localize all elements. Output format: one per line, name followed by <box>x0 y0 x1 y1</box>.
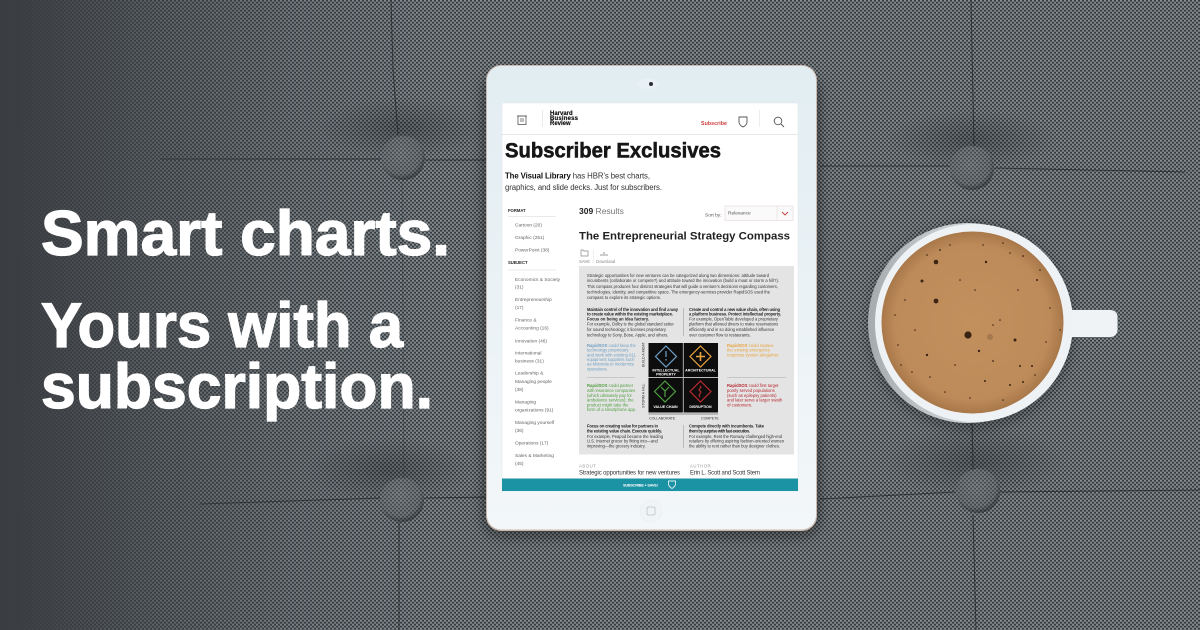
strategy text: architectural: For example, OpenTable developed a proprietary <box>689 316 779 321</box>
foam bubbles <box>894 242 1061 401</box>
tablet <box>484 65 819 536</box>
strategy text: architectural: Create and control a new value chain, often using <box>689 307 780 312</box>
matrix axes: STORM A HILL <box>642 383 646 408</box>
RapidSOS note: disruption: (such as epilepsy patients) <box>727 393 777 398</box>
page intro: graphics, and slide decks. Just for subscribers. <box>505 183 662 192</box>
RapidSOS note: disruption: RapidSOS could first target <box>727 383 779 388</box>
sort control: Sort by: <box>705 212 722 218</box>
strategy text: disruption <box>689 424 785 448</box>
headline: Smart charts. <box>41 199 450 269</box>
RapidSOS note: intellectual property: RapidSOS could keep the <box>587 343 637 348</box>
sidebar filters: Accounting (16) <box>515 326 549 332</box>
strategy text: value chain: improving—the grocery industry. <box>587 443 646 448</box>
RapidSOS note: disruption: poorly served populations <box>727 388 775 393</box>
strategy matrix: INTELLECTUAL <box>652 368 680 372</box>
strategy text: architectural <box>689 307 781 338</box>
sidebar filters: (36) <box>515 428 524 434</box>
sidebar filters: Entrepreneurship <box>515 297 552 303</box>
sidebar filters: Economics & Society <box>515 277 561 283</box>
site header: Subscribe <box>701 121 727 127</box>
about and author: Strategic opportunities for new ventures <box>579 470 680 476</box>
RapidSOS note: value chain: product might take the <box>587 402 629 407</box>
tablet camera <box>638 79 658 89</box>
sidebar filters: (45) <box>515 461 524 467</box>
coffee cup <box>868 223 1118 429</box>
save and download actions: Download <box>596 259 616 264</box>
sidebar filters: Operations (17) <box>515 440 549 446</box>
RapidSOS note: value chain: RapidSOS could partner <box>587 383 634 388</box>
sidebar filters: SUBJECT <box>508 260 528 265</box>
page intro: The Visual Library has HBR’s best charts, <box>505 172 650 180</box>
site header <box>502 110 798 134</box>
sidebar filters: PowerPoint (38) <box>515 248 550 254</box>
chart intro text <box>587 273 779 300</box>
icon: green diamond <box>654 381 676 402</box>
RapidSOS note: architectural: the existing emergency <box>727 348 771 353</box>
matrix axes <box>642 341 719 420</box>
chart intro text: technologies, identity, and competitive space. The emergency-services provider RapidSOS used the <box>587 290 771 294</box>
chart intro text: This compass produces four distinct strategies that will guide a venture’s decisions regarding customers, <box>587 284 778 289</box>
chart intro text: incumbents (collaborate or compete?) and attitude toward the innovation (build a moat or storm a hill?). <box>587 278 779 283</box>
strategy text: value chain: Focus on creating value for partners in <box>587 424 658 428</box>
sidebar filters: Finance & <box>515 318 537 324</box>
RapidSOS note: architectural: response system altogether. <box>727 352 779 357</box>
strategy text: intellectual property: to create value within the existing marketplace. <box>587 312 673 317</box>
sort control: Relevance <box>728 210 751 216</box>
strategy text: disruption: retailers by offering aspiring fashion-oriented women <box>689 439 785 444</box>
about and author <box>579 464 760 476</box>
icon: menu <box>517 116 527 124</box>
chart intro text: compass to explore its strategic options. <box>587 295 661 300</box>
sidebar filters: business (31) <box>515 358 544 364</box>
RapidSOS note: value chain <box>587 383 636 412</box>
tablet home button <box>640 500 662 522</box>
icon: blue diamond <box>656 346 676 367</box>
strategy text: architectural: a platform business. Protect intellectual property. <box>689 312 781 317</box>
sidebar filters: Managing yourself <box>515 420 555 426</box>
sidebar filters: Leadership & <box>515 370 544 376</box>
strategy text: value chain: the existing value chain. Execute quickly. <box>587 428 662 434</box>
results count: 309 Results <box>579 206 624 216</box>
logo <box>550 111 579 127</box>
logo: Business <box>550 116 579 122</box>
about and author: ABOUT <box>579 464 596 468</box>
sidebar filters: organizations (91) <box>515 408 554 414</box>
cup handle <box>1060 310 1118 337</box>
sidebar filters: (31) <box>515 284 524 290</box>
strategy matrix: VALUE CHAIN <box>653 405 678 409</box>
strategy matrix: DISRUPTION <box>689 405 712 409</box>
sidebar filters: Managing <box>515 400 536 406</box>
RapidSOS note: intellectual property: as Motorola to modernize <box>587 362 635 367</box>
strategy text: disruption: Compete directly with incumbents. Take <box>689 424 765 428</box>
strategy matrix: PROPERTY <box>656 372 676 376</box>
RapidSOS note: intellectual property: technology proprietary <box>587 348 629 353</box>
about and author: AUTHOR <box>690 464 711 468</box>
strategy text: architectural: efficiently and in so doing established influence <box>689 327 775 332</box>
RapidSOS note: intellectual property <box>587 343 637 371</box>
subscribe bar <box>502 478 798 491</box>
matrix axes: COLLABORATE <box>649 416 676 420</box>
headline: subscription. <box>41 352 433 422</box>
tablet screen <box>502 103 798 491</box>
strategy text: intellectual property: Maintain control of the innovation and find a way <box>587 307 679 312</box>
sidebar filters: Cartoon (20) <box>515 222 542 228</box>
RapidSOS note: intellectual property: and work with existing 911 <box>587 352 636 357</box>
icon: red diamond <box>690 381 711 402</box>
page intro <box>505 172 662 192</box>
chart intro text: Strategic opportunities for new ventures can be categorized along two dimensions: attitude toward <box>587 273 770 278</box>
chart title: The Entrepreneurial Strategy Compass <box>579 230 790 242</box>
icon: orange diamond <box>690 346 711 367</box>
headline <box>41 199 450 422</box>
headline: Yours with a <box>41 291 404 361</box>
about and author: Erin L. Scott and Scott Stern <box>690 470 760 476</box>
strategy text: disruption: the ability to rent rather than buy designer clothes. <box>689 443 780 448</box>
matrix axes: COMPETE <box>701 416 719 420</box>
page title: Subscriber Exclusives <box>505 140 721 162</box>
strategy text: disruption: For example, Rent the Runway challenged high-end <box>689 434 783 439</box>
strategy text: disruption: them by surprise with fast execution. <box>689 428 750 434</box>
RapidSOS note: value chain: ambulance services); the <box>587 398 634 403</box>
sidebar filters: FORMAT <box>508 208 526 213</box>
upholstery buttons <box>380 136 1000 522</box>
icon: search <box>774 117 784 127</box>
subscribe bar: SUBSCRIBE + SAVE! <box>623 484 658 488</box>
RapidSOS note: disruption: of customers. <box>727 402 752 407</box>
strategy text: intellectual property: technology to Sony, Bose, Apple, and others. <box>587 332 668 338</box>
RapidSOS note: value chain: form of a smartphone app. <box>587 407 636 412</box>
sidebar filters <box>508 208 561 467</box>
coffee foam <box>882 232 1064 414</box>
icon: shield <box>739 117 747 127</box>
sidebar filters: Innovation (46) <box>515 338 547 344</box>
strategy text: value chain: For example, Peapod became the leading <box>587 434 664 439</box>
strategy text: intellectual property: for sound technology; it licenses proprietary <box>587 327 667 332</box>
sort control <box>705 206 793 220</box>
strategy text: architectural: over customer flow to restaurants. <box>689 332 751 338</box>
logo: Harvard <box>550 111 573 117</box>
RapidSOS note: disruption <box>727 383 783 407</box>
save and download actions <box>579 250 616 264</box>
chart panel <box>579 266 794 454</box>
RapidSOS note: architectural: RapidSOS could replace <box>727 343 774 348</box>
sidebar filters: Managing people <box>515 379 552 385</box>
sidebar filters: Sales & Marketing <box>515 453 554 459</box>
sidebar filters: Graphic (251) <box>515 235 545 241</box>
strategy text: architectural: platform that allowed diners to make reservations <box>689 322 778 326</box>
RapidSOS note: disruption: and later serve a larger swath <box>727 398 783 403</box>
RapidSOS note: intellectual property: operations. <box>587 366 608 371</box>
strategy matrix: ARCHITECTURAL <box>685 368 717 372</box>
strategy text: value chain: U.S. Internet grocer by fitting into—and <box>587 439 658 444</box>
RapidSOS note: intellectual property: equipment suppliers such <box>587 357 635 362</box>
RapidSOS note: value chain: with insurance companies <box>587 388 635 393</box>
strategy text: intellectual property: For example, Dolby is the global standard setter <box>587 322 675 326</box>
logo: Review <box>550 121 571 127</box>
save and download actions: SAVE <box>579 259 590 264</box>
strategy text: intellectual property <box>587 307 679 338</box>
matrix axes: BUILD A MOAT <box>642 341 646 367</box>
RapidSOS note: value chain: (which ultimately pay for <box>587 393 633 398</box>
sidebar filters: (17) <box>515 305 524 311</box>
sidebar filters: (38) <box>515 387 524 393</box>
sidebar filters: International <box>515 350 541 356</box>
strategy text: intellectual property: Focus on being an idea factory. <box>587 316 649 321</box>
strategy text: value chain <box>587 424 664 448</box>
strategy matrix <box>648 343 718 412</box>
RapidSOS note: architectural <box>727 343 779 357</box>
